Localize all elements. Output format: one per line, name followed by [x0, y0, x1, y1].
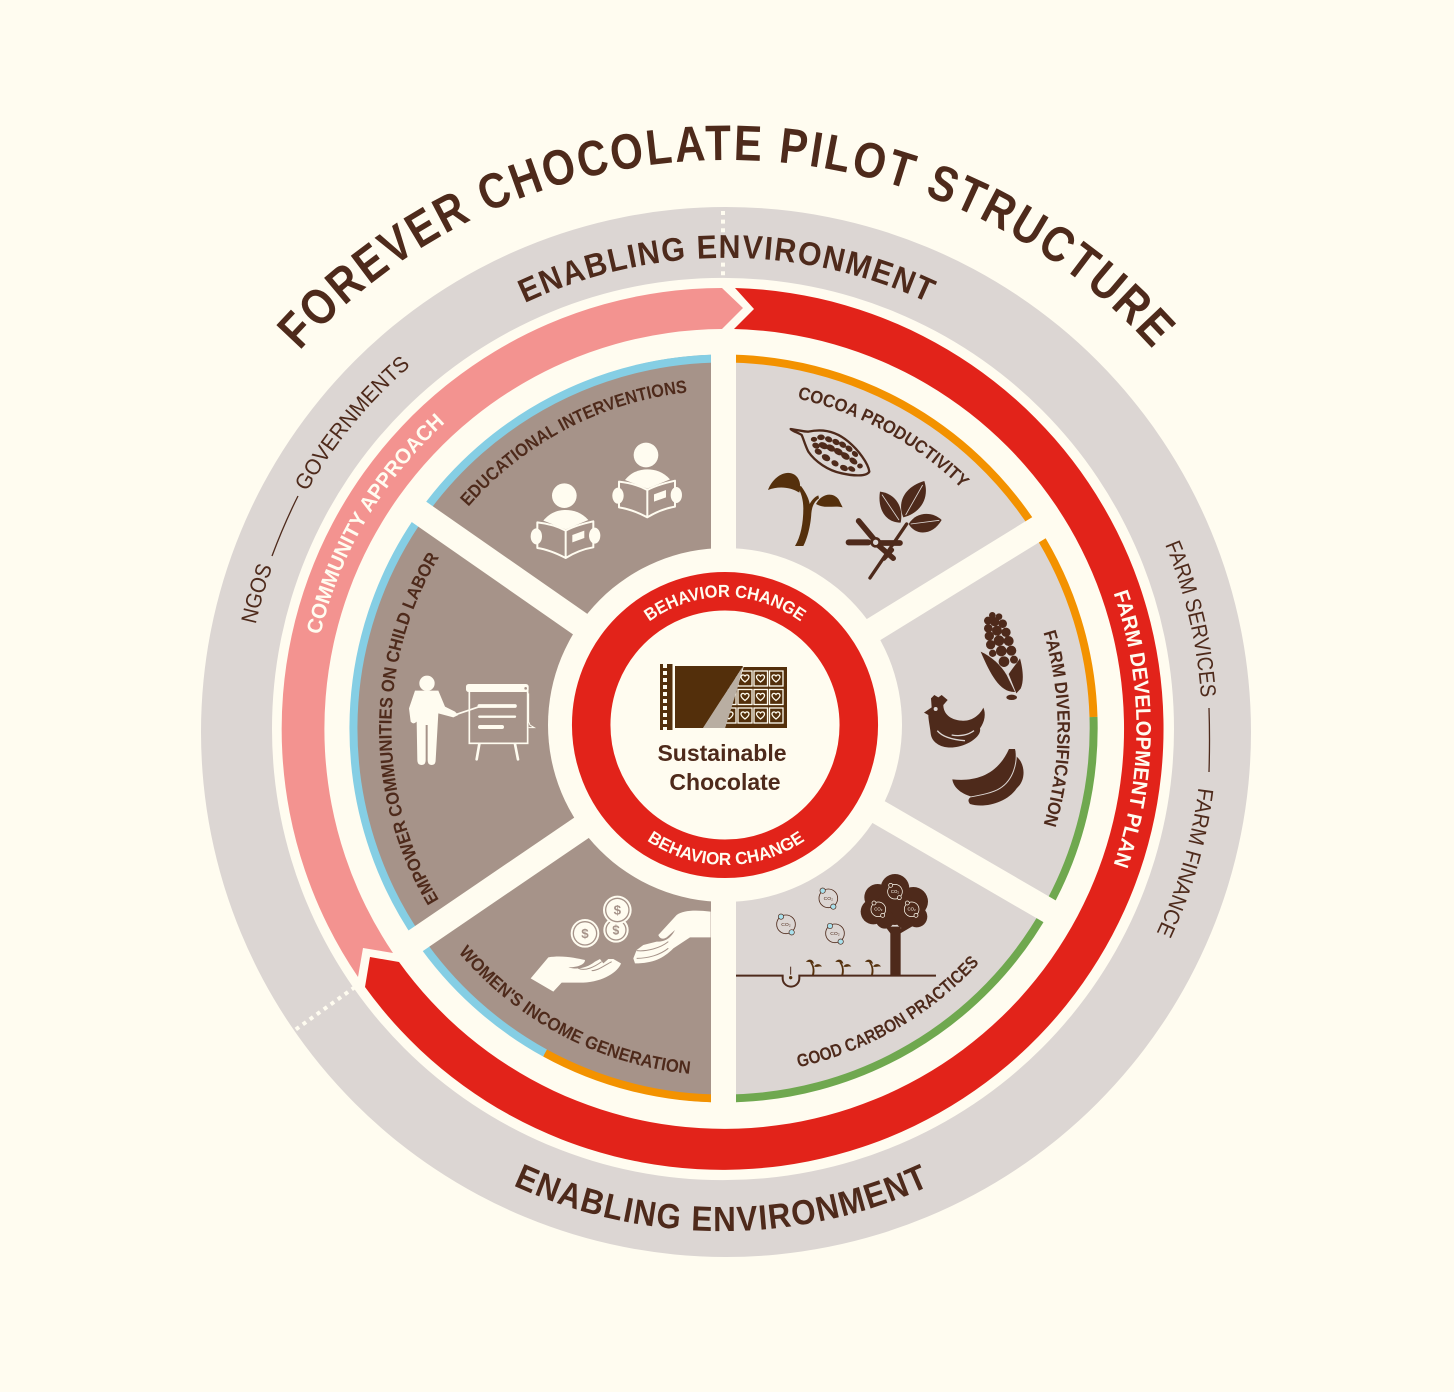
panel: empower communities on child labor — [349, 522, 574, 930]
icon: tree absorbing CO2 — [861, 874, 928, 976]
icon: CO2 molecules: CO₂ — [781, 922, 791, 928]
icon: tree absorbing CO2: CO₂ — [908, 907, 916, 912]
icon: CO2 molecules: CO₂ — [824, 896, 833, 902]
icon: tree absorbing CO2: CO₂ — [891, 889, 899, 894]
panel: cocoa productivity — [736, 354, 1032, 619]
label: good carbon practices: GOOD CARBON PRACTICES — [797, 956, 978, 1066]
panel: farm diversification — [880, 538, 1098, 900]
icon: tree absorbing CO2: CO₂ — [874, 907, 883, 912]
icon: coins: $ — [612, 923, 620, 937]
icon: CO2 molecules: CO₂ — [830, 931, 840, 937]
label: cocoa productivity: COCOA PRODUCTIVITY — [799, 388, 970, 486]
panel: good carbon practices — [736, 823, 1044, 1102]
panel: educational interventions — [426, 354, 711, 614]
label: educational interventions: EDUCATIONAL INTERVENTIONS — [460, 380, 686, 506]
heading: enabling environment top: ENABLING ENVIRONMENT — [517, 235, 937, 302]
title: FOREVER CHOCOLATE PILOT STRUCTURE — [276, 126, 1176, 349]
panel: central hub sustainable chocolate — [572, 572, 878, 878]
label: farm diversification: FARM DIVERSIFICATION — [1044, 630, 1070, 827]
icon: open hands — [531, 911, 711, 992]
icon: pruning shears and plant — [849, 481, 942, 578]
connector: NGOs to governments — [272, 496, 298, 556]
icon: presenter at flip chart — [409, 676, 534, 765]
icon: coins: $ — [581, 926, 589, 941]
label: sustainable chocolate: Chocolate — [669, 769, 781, 795]
icon: cocoa pod — [791, 429, 869, 475]
icon: bananas — [952, 749, 1024, 805]
connector: farm services to farm finance — [1208, 708, 1210, 772]
label: behavior change top: BEHAVIOR CHANGE — [643, 584, 807, 622]
label: sustainable chocolate: Sustainable — [657, 740, 787, 766]
label: farm finance: FARM FINANCE — [1156, 789, 1214, 938]
label: NGOs: NGOS — [241, 564, 271, 623]
arrow: community approach — [282, 288, 743, 977]
icon: corn — [981, 613, 1023, 700]
heading: enabling environment bottom: ENABLING ENVIRONMENT — [515, 1164, 923, 1232]
label: governments: GOVERNMENTS — [296, 356, 408, 488]
label: behavior change bottom: BEHAVIOR CHANGE — [648, 830, 805, 865]
label: farm services: FARM SERVICES — [1166, 540, 1216, 696]
label: women's income generation: WOMEN'S INCOME GENERATION — [460, 944, 690, 1074]
icon: reader left — [531, 483, 600, 558]
icon: chocolate bar — [660, 664, 787, 730]
icon: CO2 molecules — [777, 888, 844, 944]
arrow: community approach: COMMUNITY APPROACH — [308, 413, 444, 633]
icon: hen — [924, 695, 985, 748]
icon: sprout — [768, 473, 843, 546]
arrow: farm development plan: FARM DEVELOPMENT PLAN — [1114, 590, 1152, 868]
label: empower communities on child labor: EMPOWER COMMUNITIES ON CHILD LABOR — [379, 552, 439, 906]
icon: reader right — [612, 443, 682, 517]
icon: ground line with seed and seedlings — [736, 960, 936, 987]
icon: coins: $ — [614, 903, 622, 918]
icon: coins — [571, 896, 632, 948]
panel: women's income generation — [422, 838, 711, 1102]
panel: enabling environment outer ring — [201, 207, 1251, 1257]
